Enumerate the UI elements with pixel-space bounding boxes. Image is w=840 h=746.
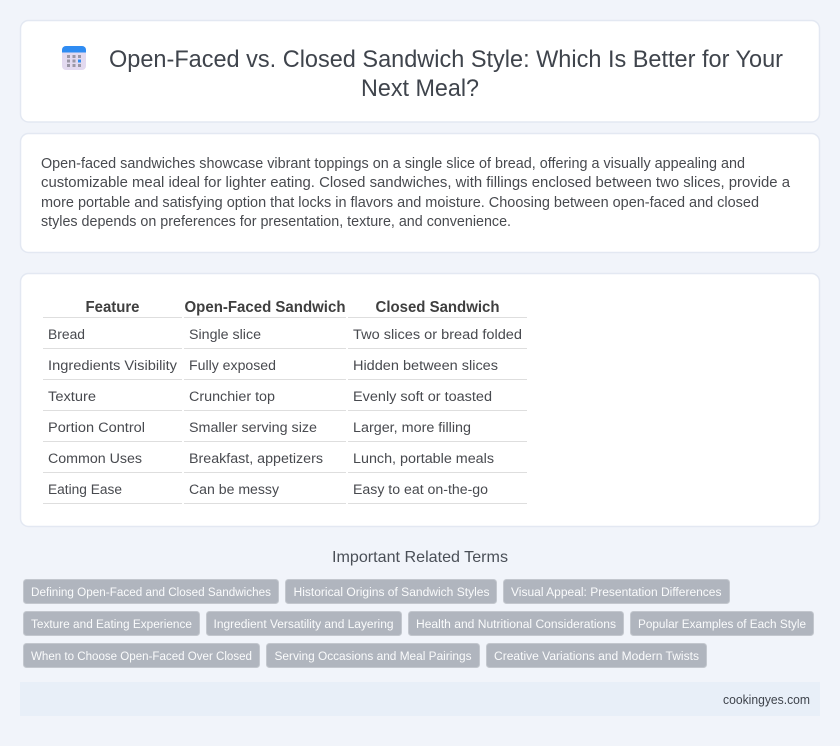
table rows: Breakfast, appetizers <box>189 451 323 467</box>
related term tags: Visual Appeal: Presentation Differences <box>511 585 722 599</box>
icon: calendar <box>62 46 86 70</box>
text block: intro: Open-faced sandwiches showcase vibrant toppings on a single slice of bread, offering a visually appealing and <box>41 156 745 172</box>
table rows: Two slices or bread folded <box>353 327 522 343</box>
related term tags: Texture and Eating Experience <box>31 617 192 631</box>
text block: intro: customizable meal ideal for lighter eating. Closed sandwiches, with fillings enclosed between two slices, provide a <box>41 175 790 191</box>
table rows: Larger, more filling <box>353 420 471 436</box>
table header: Closed Sandwich <box>376 299 500 316</box>
related term tags: When to Choose Open-Faced Over Closed <box>31 649 252 663</box>
table rows: Crunchier top <box>189 389 275 405</box>
panel: comparison table <box>20 274 820 526</box>
related term tags: Popular Examples of Each Style <box>638 617 806 631</box>
table rows: Easy to eat on-the-go <box>353 482 488 498</box>
table rows: Lunch, portable meals <box>353 451 494 467</box>
table rules <box>43 317 527 504</box>
text block: intro <box>41 156 790 230</box>
table header: Open-Faced Sandwich <box>184 299 346 316</box>
related term tags: Creative Variations and Modern Twists <box>494 649 699 663</box>
table rows: Bread <box>48 327 85 343</box>
table rows: Portion Control <box>48 420 145 436</box>
related term tags <box>24 580 814 668</box>
footer: cookingyes.com <box>723 693 810 707</box>
title: Next Meal? <box>361 75 479 102</box>
footer <box>20 682 820 716</box>
related term tags: Defining Open-Faced and Closed Sandwiches <box>31 585 271 599</box>
table rows: Hidden between slices <box>353 358 498 374</box>
text block: intro: styles depends on preferences for presentation, texture, and convenience. <box>41 214 511 230</box>
related term tags: Health and Nutritional Considerations <box>416 617 616 631</box>
table rows: Eating Ease <box>48 482 122 498</box>
table rows: Can be messy <box>189 482 280 498</box>
table rows: Fully exposed <box>189 358 276 374</box>
panel: intro paragraph <box>20 134 820 252</box>
related term tags: Historical Origins of Sandwich Styles <box>294 585 490 599</box>
related term tags: Ingredient Versatility and Layering <box>214 617 394 631</box>
table rows: Smaller serving size <box>189 420 317 436</box>
title: Open-Faced vs. Closed Sandwich Style: Which Is Better for Your <box>109 46 783 73</box>
table rows: Evenly soft or toasted <box>353 389 492 405</box>
header panel <box>20 20 820 122</box>
table header: Feature <box>86 299 140 316</box>
title <box>109 46 783 102</box>
table rows: Common Uses <box>48 451 142 467</box>
table header <box>86 299 500 316</box>
related term tags: Serving Occasions and Meal Pairings <box>274 649 472 663</box>
heading: related terms: Important Related Terms <box>332 549 508 566</box>
table rows <box>48 327 522 498</box>
table rows: Texture <box>48 389 96 405</box>
table rows: Single slice <box>189 327 261 343</box>
text block: intro: more portable and satisfying option that locks in flavors and moisture. Choosing between open-faced and closed <box>41 195 759 211</box>
table rows: Ingredients Visibility <box>48 358 178 374</box>
